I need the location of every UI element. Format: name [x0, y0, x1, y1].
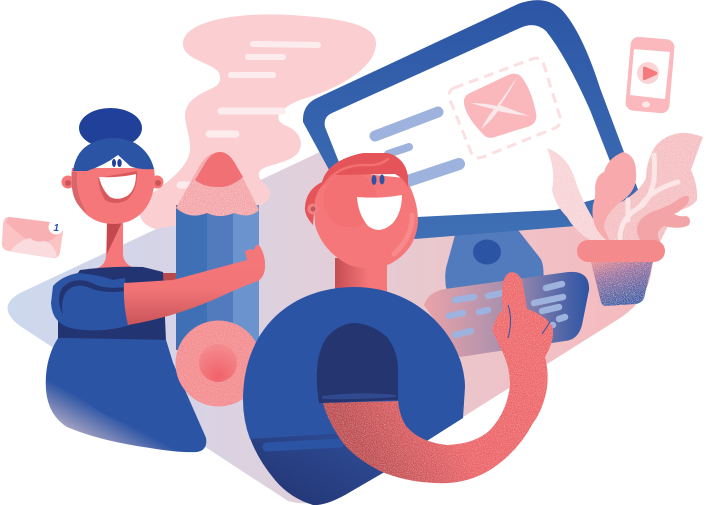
right leaf: [604, 133, 703, 242]
woman head: [62, 108, 164, 224]
man arm: [323, 272, 553, 483]
left leaf: [547, 148, 610, 248]
woman front arm: [124, 245, 265, 325]
leaf vein: [620, 155, 678, 238]
man body: [243, 287, 465, 458]
icon: envelope: [2, 217, 64, 258]
woman skirt: [46, 338, 206, 452]
man: [243, 153, 553, 505]
hair front: [73, 138, 154, 171]
man ear: [308, 204, 318, 214]
screen text bars: [375, 112, 459, 181]
man head: [314, 172, 418, 268]
finger lines: [508, 305, 550, 338]
belt highlight: [267, 443, 340, 447]
cuff line: [322, 393, 396, 399]
monitor: [303, 0, 640, 292]
plant: [547, 133, 703, 306]
woman sleeve: [51, 273, 130, 330]
man neck: [335, 258, 387, 292]
icon: phone: [625, 36, 675, 114]
mouth shadow: [98, 171, 137, 203]
inner leaf shade: [637, 196, 690, 241]
pencil lead: [195, 152, 243, 187]
woman neck: [98, 220, 134, 268]
sleeve opening: [317, 323, 398, 403]
face: [71, 168, 155, 224]
woman mouth: [99, 174, 136, 199]
stand dot: [473, 240, 501, 264]
man eyes: [372, 175, 376, 185]
hair bun: [79, 108, 142, 148]
man cheek: [323, 173, 377, 227]
man hair: [305, 153, 408, 225]
badge: [48, 220, 64, 234]
head highlight: [394, 215, 412, 254]
background shape: [8, 105, 652, 503]
dashed image placeholder: [449, 58, 560, 158]
monitor stand: [445, 230, 544, 292]
pencil wood tip: [176, 152, 259, 216]
pencil: [176, 152, 262, 406]
man mouth: [357, 195, 402, 230]
badge number: 1: [54, 223, 60, 234]
monitor frame: [303, 0, 640, 239]
back arm: [160, 273, 180, 283]
keyboard: [424, 272, 589, 357]
face shade: [72, 172, 87, 213]
keyboard keys: [449, 284, 565, 335]
neck shadow: [107, 222, 122, 254]
skirt solid: [60, 338, 206, 446]
woman: [46, 220, 206, 452]
right ear: [150, 176, 164, 188]
placeholder picture: [464, 74, 536, 138]
panel: pink cloud with text lines: [140, 14, 376, 229]
pot rim: [577, 240, 665, 262]
pencil end inner circle: [199, 344, 237, 382]
middle leaf: [592, 152, 636, 244]
man body bottom: [250, 432, 395, 505]
woman eyes: [112, 159, 116, 167]
pencil end circle: [176, 320, 262, 406]
left ear: [62, 176, 74, 188]
hair highlight: [325, 159, 388, 184]
woman torso: [58, 267, 166, 341]
monitor screen: [325, 25, 622, 217]
sleeve fold: [59, 280, 125, 315]
plant pot: [590, 258, 654, 306]
